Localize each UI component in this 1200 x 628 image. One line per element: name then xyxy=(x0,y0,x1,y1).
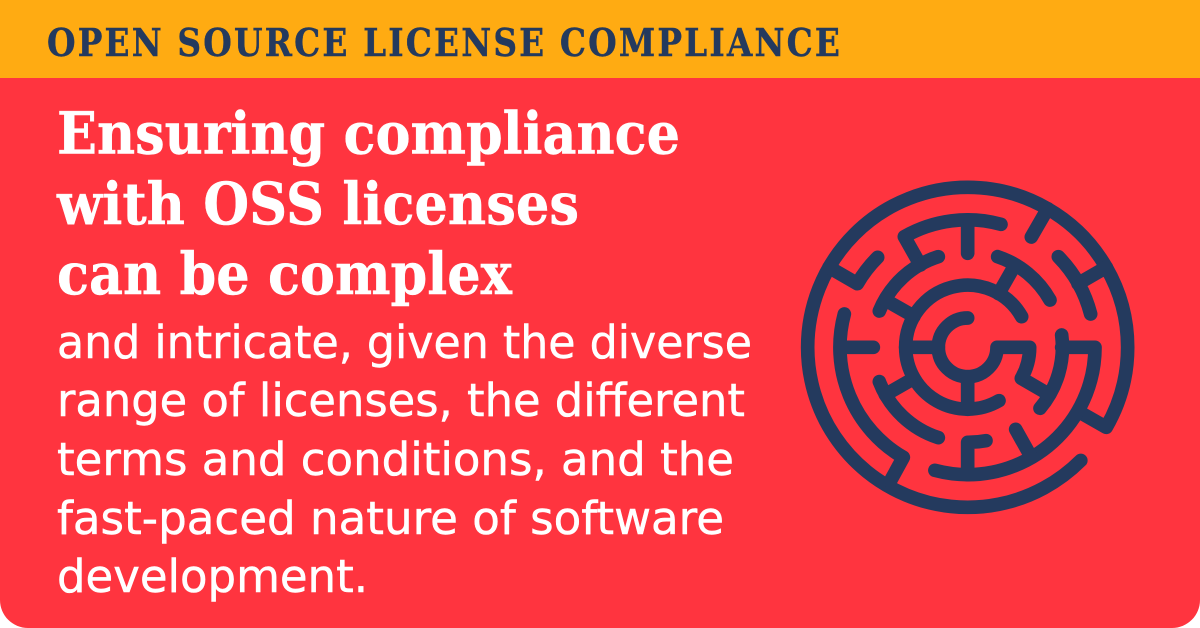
body text xyxy=(57,316,752,603)
heading: can be complex xyxy=(57,240,512,308)
body text: terms and conditions, and the xyxy=(57,433,734,486)
title: OPEN SOURCE LICENSE COMPLIANCE xyxy=(47,20,842,65)
heading: Ensuring compliance xyxy=(57,100,680,168)
body text: development. xyxy=(57,550,368,603)
body text: fast-paced nature of software xyxy=(57,492,724,545)
heading: with OSS licenses xyxy=(56,170,579,238)
heading xyxy=(56,100,680,308)
header band xyxy=(0,0,1200,78)
body text: range of licenses, the different xyxy=(57,374,745,427)
icon: circular maze xyxy=(808,187,1128,507)
body text: and intricate, given the diverse xyxy=(57,316,752,369)
